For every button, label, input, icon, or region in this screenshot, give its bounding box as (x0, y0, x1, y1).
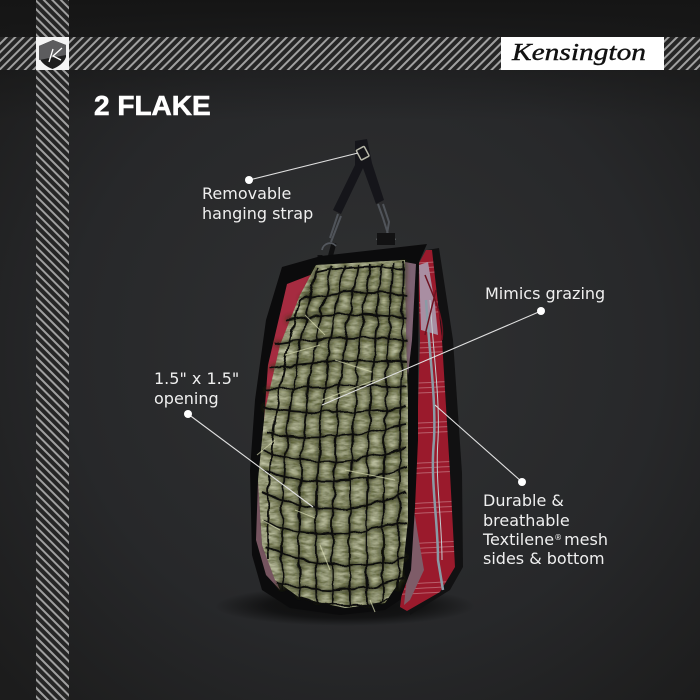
label: mesh material: mesh (564, 530, 608, 549)
label: mesh material: breathable (483, 511, 570, 530)
leader: mesh (435, 405, 526, 486)
label: mesh material: ® (554, 533, 562, 542)
side panel: outer black binding (410, 248, 463, 615)
label: removable hanging strap: hanging strap (202, 204, 313, 223)
bag floor shadow (215, 586, 475, 626)
hay (258, 260, 408, 608)
hanging strap (320, 139, 395, 270)
brand logo: Kensington: Kensington (511, 40, 646, 66)
label: mesh material: Durable & (483, 491, 564, 510)
vertical hatched band (36, 0, 69, 700)
hay net (263, 262, 407, 606)
label: mimics grazing: Mimics grazing (485, 284, 605, 303)
left plaid strip (264, 272, 318, 420)
side panel: red plaid mesh (400, 250, 455, 611)
label: opening size: 1.5" x 1.5" (154, 369, 239, 388)
loose hay straws (257, 315, 395, 612)
leader: mimics grazing (322, 307, 545, 405)
horizontal hatched band (0, 37, 700, 70)
label: removable hanging strap: Removable (202, 184, 291, 203)
net shadow (263, 262, 407, 606)
left lower plaid strip (256, 480, 280, 590)
title: 2 FLAKE (94, 90, 211, 121)
bag front black binding (250, 244, 427, 615)
label: opening size: opening (154, 389, 219, 408)
plaid strip by front edge (404, 262, 416, 375)
leader: hanging strap (245, 153, 358, 184)
brand logo: Kensington (501, 37, 664, 70)
icon: Kensington shield logo (36, 37, 69, 70)
leader: opening (184, 410, 313, 507)
label: mesh material: Textilene (482, 530, 608, 549)
label: mesh material: sides & bottom (483, 549, 605, 568)
product: hay bag (215, 139, 475, 626)
